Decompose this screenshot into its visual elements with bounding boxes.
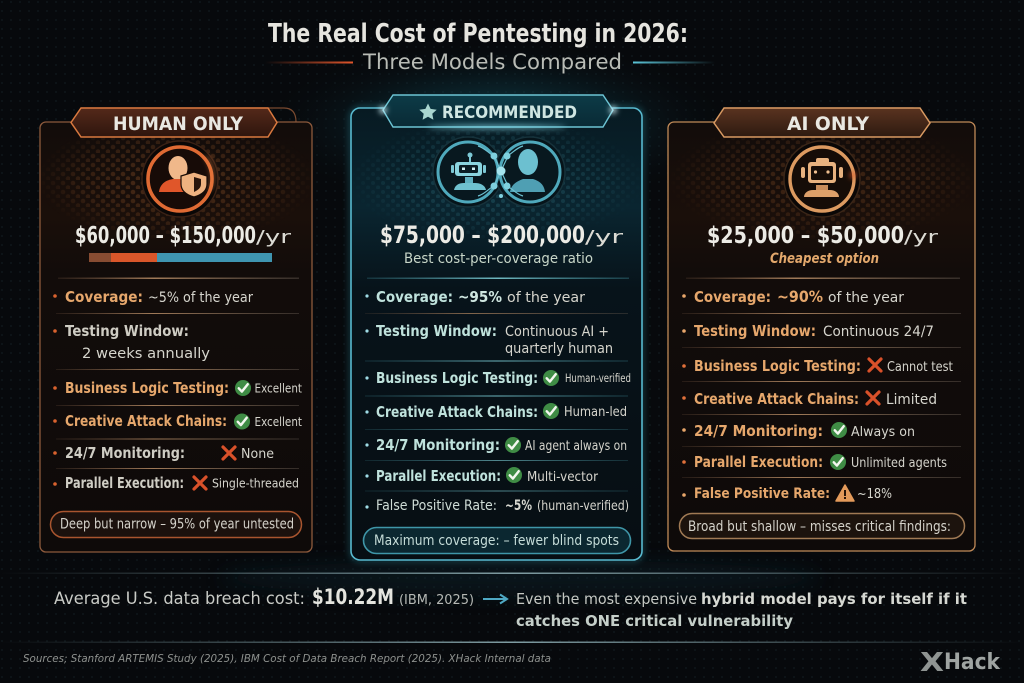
callout: ai only: [680, 514, 964, 538]
row: false positive rate: ~5%: [505, 498, 532, 514]
row: creative attack chains: Creative Attack Chains:: [376, 403, 538, 421]
bottom message: Even the most expensive: [516, 590, 697, 608]
row: testing window: [682, 322, 934, 340]
row: parallel execution: [682, 453, 947, 471]
bottom stat: breach cost: Average U.S. data breach cost:: [54, 589, 305, 609]
row: creative attack chains: Human-led: [564, 404, 627, 420]
price: human only: $60,000 – $150,000: [75, 223, 256, 249]
row: creative attack chains: Creative Attack Chains:: [694, 390, 859, 408]
row: coverage: ~90%: [777, 287, 823, 306]
price: recommended: $75,000 – $200,000: [380, 221, 585, 249]
row: testing window: Testing Window:: [65, 322, 189, 340]
row: parallel execution: Single-threaded: [212, 476, 299, 490]
callout: human only: [50, 512, 302, 538]
row: 24/7 monitoring: 24/7 Monitoring:: [376, 436, 500, 454]
row: parallel execution: Parallel Execution:: [65, 474, 184, 492]
row: 24/7 monitoring: [682, 422, 915, 440]
row: testing window: [53, 322, 210, 362]
icon: cross: [867, 392, 879, 404]
row: testing window: Continuous AI +: [505, 324, 609, 340]
row: 24/7 monitoring: AI agent always on: [525, 438, 627, 454]
logo: xhack: X: [920, 648, 944, 678]
bottom stat: breach cost: $10.22M: [312, 585, 394, 609]
row: coverage: [682, 287, 904, 306]
row: coverage: ~95%: [458, 288, 502, 306]
row: false positive rate: False Positive Rate:: [376, 498, 497, 514]
row: 24/7 monitoring: 24/7 Monitoring:: [65, 444, 185, 462]
row: coverage: Coverage:: [694, 288, 771, 306]
icon: check: [543, 403, 559, 419]
callout: recommended: [364, 528, 630, 554]
bottom message: [516, 590, 968, 630]
callout: human only: Deep but narrow – 95% of year untested: [60, 516, 294, 532]
bottom stat: breach cost: [54, 585, 474, 609]
badge: recommended: [380, 95, 616, 128]
row: coverage: Coverage:: [65, 288, 143, 306]
row: coverage: Coverage:: [376, 288, 453, 306]
row: business logic: Excellent: [254, 380, 302, 396]
badge: human only: HUMAN ONLY: [113, 113, 243, 135]
bottom message: catches ONE critical vulnerability: [516, 612, 793, 630]
icon: check: [543, 370, 559, 386]
row: testing window: quarterly human: [505, 341, 613, 357]
badge: human only: [71, 108, 277, 137]
icon: star: [419, 104, 437, 120]
row: parallel execution: Unlimited agents: [851, 455, 947, 471]
row: false positive rate: (human-verified): [537, 498, 629, 514]
price: human only: /yr: [256, 227, 292, 248]
row: testing window: Testing Window:: [376, 322, 497, 340]
row: creative attack chains: Creative Attack Chains:: [65, 412, 227, 430]
row: testing window: Testing Window:: [694, 322, 816, 340]
badge: ai only: AI ONLY: [787, 113, 869, 135]
title: [265, 19, 715, 75]
row: business logic: Cannot test: [887, 360, 953, 375]
price: recommended: /yr: [585, 227, 624, 248]
icon: robot: [784, 141, 860, 217]
row: coverage: ~5% of the year: [148, 290, 253, 306]
price: ai only: /yr: [904, 227, 939, 248]
panel: recommended hybrid: [351, 95, 642, 560]
logo: xhack: [920, 648, 1001, 678]
icon: cross: [869, 359, 881, 371]
icon: check: [505, 437, 521, 453]
logo: xhack: Hack: [944, 650, 1001, 675]
row: testing window: 2 weeks annually: [82, 346, 210, 362]
price: ai only: $25,000 – $50,000: [707, 223, 904, 249]
subtitle: best ratio: Best cost-per-coverage ratio: [404, 251, 593, 267]
icon: check: [830, 454, 846, 470]
row: coverage: of the year: [507, 290, 585, 306]
row: false positive rate: [365, 498, 629, 514]
icon: warning: [836, 485, 854, 501]
subtitle: cheapest option: Cheapest option: [770, 251, 879, 267]
row: creative attack chains: Limited: [886, 392, 937, 408]
icon: check: [831, 422, 847, 438]
bottom message: hybrid model pays for itself if it: [701, 590, 968, 608]
row: 24/7 monitoring: Always on: [851, 424, 915, 440]
row: coverage: [53, 288, 253, 306]
row: coverage: [365, 288, 585, 306]
row: parallel execution: Parallel Execution:: [376, 467, 501, 485]
row: 24/7 monitoring: [365, 436, 627, 454]
sources: Sources; Stanford ARTEMIS Study (2025), IBM Cost of Data Breach Report (2025). XHack Internal data: [23, 652, 551, 665]
row: 24/7 monitoring: [53, 444, 274, 462]
icon: check: [234, 413, 250, 430]
bottom stat: breach cost: (IBM, 2025): [399, 592, 474, 608]
icon: human with shield: [142, 141, 218, 217]
row: business logic: Business Logic Testing:: [694, 357, 861, 375]
row: parallel execution: [365, 467, 598, 485]
row: 24/7 monitoring: None: [241, 446, 274, 462]
row: business logic: Business Logic Testing:: [376, 369, 538, 387]
badge: recommended: RECOMMENDED: [442, 103, 577, 123]
callout: ai only: Broad but shallow – misses critical findings:: [688, 519, 951, 535]
panel: human only: [40, 108, 312, 552]
row: coverage: of the year: [828, 290, 904, 306]
row: false positive rate: ~18%: [857, 486, 892, 502]
title: Three Models Compared: [362, 50, 622, 75]
icon: check: [235, 380, 251, 396]
icon: cross: [194, 477, 206, 489]
row: business logic: Business Logic Testing:: [65, 379, 229, 397]
row: 24/7 monitoring: 24/7 Monitoring:: [694, 422, 823, 440]
row: testing window: [365, 322, 613, 357]
row: false positive rate: False Positive Rate:: [694, 486, 830, 502]
title: The Real Cost of Pentesting in 2026:: [268, 19, 688, 49]
arrow: [483, 594, 507, 604]
icon: robot and human linked: [433, 137, 565, 207]
row: business logic: Human-verified: [565, 371, 631, 385]
row: creative attack chains: Excellent: [254, 414, 302, 429]
callout: recommended: Maximum coverage: – fewer blind spots: [374, 533, 619, 549]
cost bar: [89, 253, 272, 262]
row: parallel execution: [53, 474, 299, 492]
row: parallel execution: Multi-vector: [527, 469, 598, 485]
panel: ai only: [668, 108, 975, 551]
row: testing window: Continuous 24/7: [823, 324, 934, 340]
row: parallel execution: Parallel Execution:: [694, 453, 823, 471]
icon: cross: [223, 447, 235, 459]
badge: ai only: [714, 108, 930, 137]
icon: check: [506, 467, 522, 483]
